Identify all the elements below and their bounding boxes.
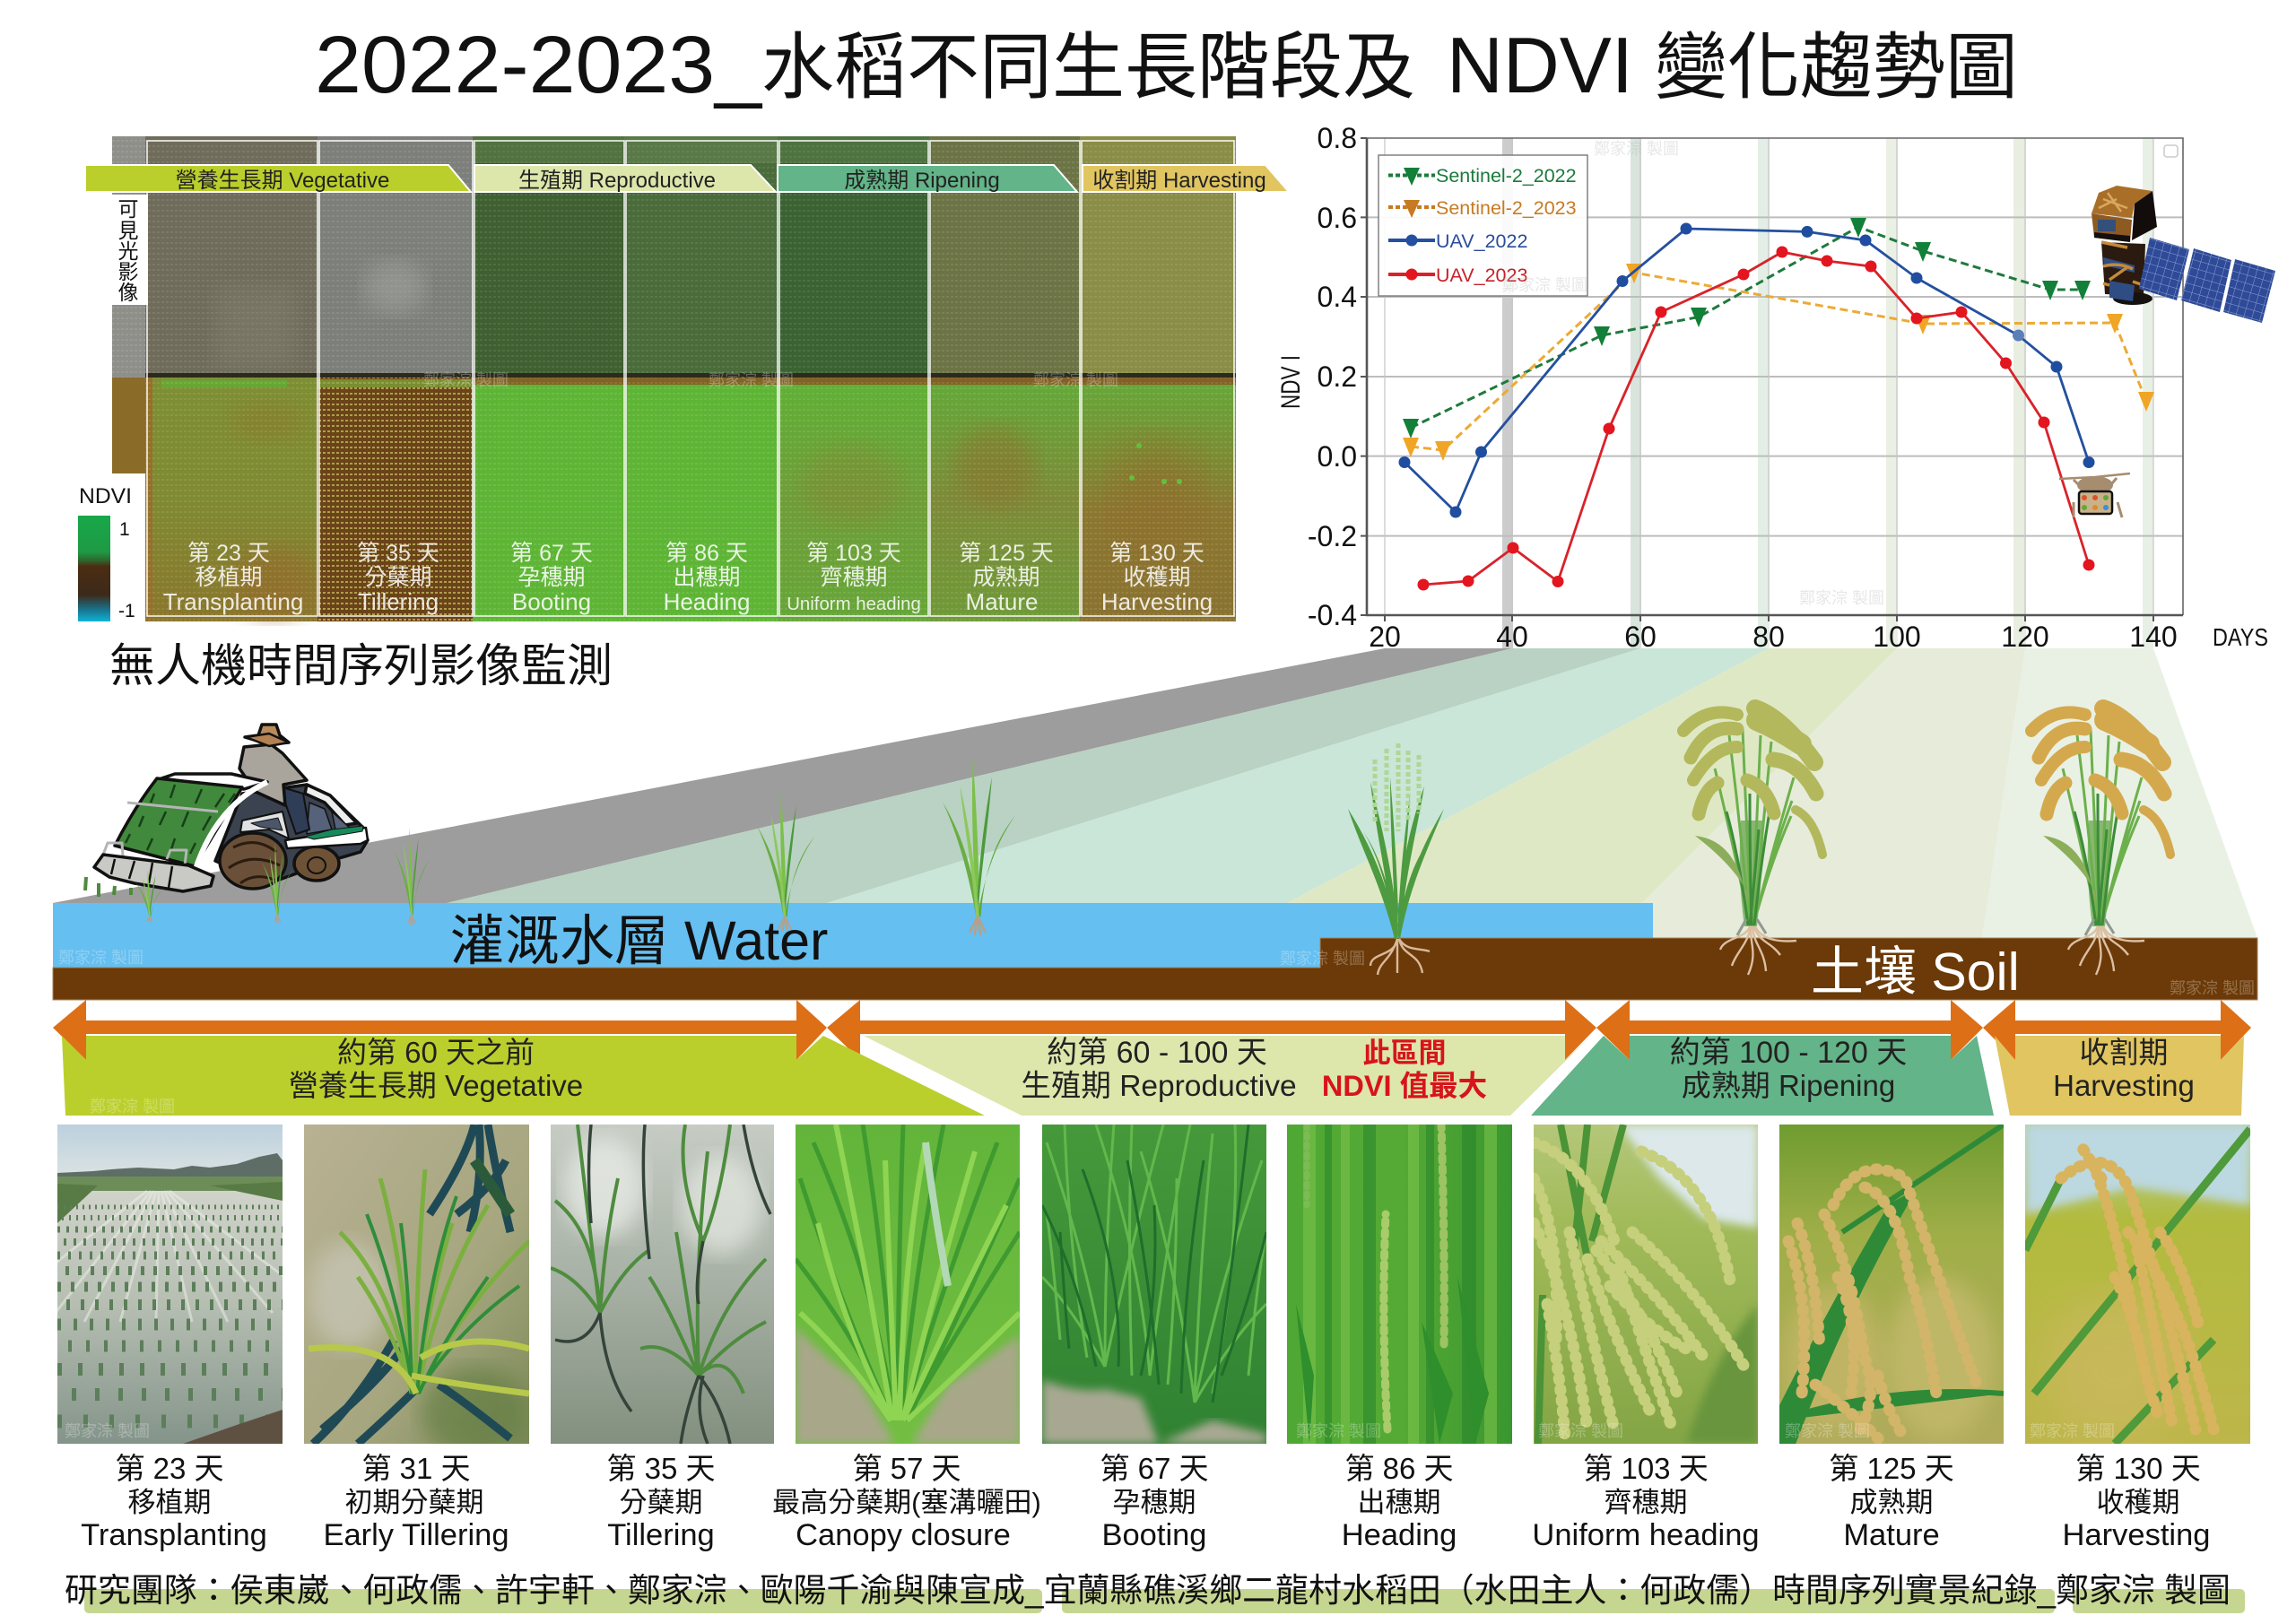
caption: day 67: Booting — [1101, 1518, 1207, 1552]
icon: rice transplanter with driver — [85, 725, 368, 897]
plant: heading stage — [1348, 743, 1444, 975]
stage labels on the imagery: Booting — [512, 588, 591, 615]
banner: Reproductive: 生殖期 Reproductive — [518, 169, 716, 193]
caption: UAV monitoring: 無人機時間序列影像監測 — [109, 640, 613, 691]
photo: day 130 harvesting — [2025, 1125, 2250, 1444]
watermarks: 鄭家淙 製圖 — [1296, 1422, 1381, 1440]
seedling: day 31 — [262, 843, 293, 924]
watermarks: 鄭家淙 製圖 — [1785, 1422, 1870, 1440]
panel: reproductive period — [864, 1036, 1591, 1116]
banner: Vegetative: 營養生長期 Vegetative — [176, 169, 389, 193]
NDVI imagery band — [112, 378, 1236, 621]
chart legend: UAV_2023 — [1436, 265, 1527, 286]
watermarks: 鄭家淙 製圖 — [90, 1098, 175, 1116]
caption: day 86: 出穗期 — [1358, 1487, 1440, 1518]
watermarks: 鄭家淙 製圖 — [65, 1422, 150, 1440]
caption: day 35: 第 35 天 — [606, 1452, 716, 1485]
arrow: reproductive span — [827, 1000, 1596, 1060]
label: visible-light imagery: 可 — [118, 197, 138, 221]
y-axis tick labels: -0.4 — [1308, 599, 1357, 631]
plant: harvest stage — [2031, 708, 2170, 975]
series: UAV 2023 — [1417, 246, 2095, 590]
caption: day 130: 收穫期 — [2097, 1487, 2179, 1518]
panel: ripening period — [1531, 1036, 1994, 1116]
caption: day 57: 最高分蘖期(塞溝曬田) — [772, 1487, 1041, 1518]
y-axis tick labels: 0.0 — [1318, 440, 1357, 473]
stage labels on the imagery: 出穗期 — [673, 565, 741, 590]
plant: ripening stage — [1683, 708, 1822, 975]
stage labels on the imagery: Heading — [664, 588, 750, 615]
photo captions — [81, 1452, 2210, 1552]
caption: day 67: 孕穗期 — [1112, 1487, 1196, 1518]
panel: vegetative period — [62, 1036, 985, 1116]
irrigation water layer: 灌溉水層 Water — [450, 910, 828, 971]
watermarks: 鄭家淙 製圖 — [1280, 950, 1365, 968]
x-axis tick labels: 60 — [1624, 621, 1657, 653]
panel: ripening period: 成熟期 Ripening — [1682, 1069, 1895, 1102]
banner: Harvesting: 收割期 Harvesting — [1092, 169, 1266, 193]
NDVI colour legend — [78, 484, 135, 621]
frames around each date column — [147, 141, 1234, 616]
watermarks: 鄭家淙 製圖 — [1538, 1422, 1623, 1440]
watermarks: 鄭家淙 製圖 — [2030, 1422, 2115, 1440]
stage labels on the imagery: Mature — [966, 588, 1038, 615]
stage labels on the imagery: 齊穗期 — [820, 565, 888, 590]
caption: day 103: Uniform heading — [1532, 1518, 1760, 1552]
label: visible-light imagery: 影 — [118, 260, 138, 283]
y-axis tick labels: 0.4 — [1318, 281, 1357, 313]
seedling: day 35 — [395, 828, 430, 925]
caption: day 23: 移植期 — [127, 1487, 212, 1518]
stage labels on the imagery: 第 103 天 — [806, 541, 901, 566]
photo: day 31 early tillering — [304, 1125, 529, 1444]
x-axis tick labels — [1369, 621, 2178, 653]
caption: day 125: 成熟期 — [1849, 1487, 1934, 1518]
caption: day 23: 第 23 天 — [115, 1452, 224, 1485]
title: 水稻不同生長階段及 — [761, 28, 1415, 109]
watermarks: 鄭家淙 製圖 — [58, 949, 144, 967]
panel: vegetative period: 營養生長期 Vegetative — [289, 1069, 583, 1102]
title: NDVI — [1447, 21, 1633, 109]
perspective wedges from chart down to the field — [53, 648, 2257, 938]
chart legend: Sentinel-2_2023 — [1436, 197, 1577, 219]
NDVI line chart — [1276, 122, 2268, 653]
stage labels on the imagery: Uniform heading — [787, 595, 921, 614]
arrow: harvesting span — [1983, 1000, 2251, 1060]
soil layer: 土壤 Soil — [1811, 942, 2020, 1002]
stage labels on the imagery: 第 23 天 — [187, 541, 270, 566]
caption: day 23: Transplanting — [81, 1518, 267, 1552]
arrow: vegetative span — [53, 1000, 827, 1060]
caption: day 130 — [2063, 1452, 2210, 1552]
caption: day 86: 第 86 天 — [1344, 1452, 1454, 1485]
caption: day 67 — [1100, 1452, 1209, 1552]
visible-light imagery band — [112, 136, 1236, 378]
seedling: day 23 — [136, 870, 165, 922]
photo: day 125 mature — [1779, 1125, 2004, 1444]
timeline arrows — [53, 1000, 2251, 1060]
watermarks — [58, 140, 2255, 1440]
caption: day 103: 第 103 天 — [1583, 1452, 1709, 1485]
panel: reproductive period: NDVI 值最大 — [1322, 1070, 1487, 1102]
x-axis tick labels: 20 — [1369, 621, 1401, 653]
series: UAV 2022 — [1399, 222, 2095, 518]
x-axis tick labels: 120 — [2001, 621, 2049, 653]
stage labels on the imagery: Transplanting — [163, 588, 303, 615]
caption: day 35 — [606, 1452, 716, 1552]
title: 變化趨勢圖 — [1655, 28, 2018, 109]
arrow: ripening span — [1596, 1000, 1983, 1060]
caption: day 86 — [1342, 1452, 1457, 1552]
y-axis title: NDV I — [1276, 355, 1306, 409]
watermarks: 鄭家淙 製圖 — [1502, 276, 1587, 294]
panel: harvesting period: 收割期 — [2079, 1036, 2169, 1069]
stage labels on the imagery: 第 130 天 — [1109, 541, 1205, 566]
photo: day 103 uniform heading — [1534, 1125, 1758, 1444]
NDVI colour legend: 1 — [119, 519, 130, 540]
caption: day 103 — [1532, 1452, 1760, 1552]
caption: day 31: Early Tillering — [323, 1518, 509, 1552]
caption: day 31: 初期分蘖期 — [344, 1487, 484, 1518]
caption: day 130: Harvesting — [2063, 1518, 2210, 1552]
watermarks: 鄭家淙 製圖 — [1799, 589, 1884, 607]
watermarks: 鄭家淙 製圖 — [709, 371, 794, 389]
caption: day 86: Heading — [1342, 1518, 1457, 1552]
panel: ripening period: 約第 100 - 120 天 — [1670, 1036, 1907, 1070]
y-axis tick labels: 0.8 — [1318, 122, 1357, 154]
NDVI colour legend: NDVI — [79, 484, 132, 508]
banner: Reproductive — [474, 165, 776, 193]
chart legend: UAV_2022 — [1436, 230, 1527, 252]
y-axis tick labels: -0.2 — [1308, 520, 1357, 552]
caption: day 35: Tillering — [607, 1518, 715, 1552]
panel: reproductive period: 此區間 — [1363, 1038, 1446, 1069]
chart legend: Sentinel-2_2022 — [1436, 165, 1577, 187]
stage bands — [1502, 138, 2153, 648]
x-axis tick labels: 100 — [1873, 621, 1921, 653]
y-axis tick labels — [1308, 122, 1357, 631]
label: visible-light imagery: 像 — [118, 281, 138, 304]
irrigation water layer — [53, 903, 1653, 971]
banner: Vegetative — [85, 165, 471, 193]
stage labels on the imagery: 分蘖期 — [364, 565, 432, 590]
caption: day 23 — [81, 1452, 267, 1552]
stage labels on the imagery: 第 67 天 — [510, 541, 593, 566]
caption: day 57 — [772, 1452, 1041, 1552]
caption: day 57: 第 57 天 — [852, 1452, 961, 1485]
icon: satellite — [2092, 186, 2275, 323]
banner: Ripening: 成熟期 Ripening — [844, 169, 1000, 193]
photo: day 57 canopy closure — [796, 1125, 1020, 1444]
stage labels on the imagery: Tillering — [358, 588, 439, 615]
stage labels on the imagery: 孕穗期 — [517, 565, 586, 590]
caption: day 35: 分蘖期 — [619, 1487, 703, 1518]
caption: day 125: 第 125 天 — [1829, 1452, 1954, 1485]
x-axis tick labels: 140 — [2129, 621, 2178, 653]
caption: day 103: 齊穗期 — [1604, 1487, 1688, 1518]
watermarks: 鄭家淙 製圖 — [1033, 371, 1118, 389]
photo: day 23 transplanting field — [57, 1125, 283, 1444]
watermarks: 鄭家淙 製圖 — [1594, 140, 1679, 158]
stage labels on the imagery — [163, 541, 1213, 615]
series: Sentinel-2 2022 — [1403, 218, 2091, 439]
title: 2022-2023_ — [315, 21, 763, 110]
soil layer — [53, 938, 2257, 1002]
stage labels on the imagery: 成熟期 — [972, 565, 1040, 590]
stage labels on the imagery: Harvesting — [1101, 588, 1213, 615]
stage labels on the imagery: 收穫期 — [1123, 565, 1191, 590]
panel: reproductive period: 約第 60 - 100 天 — [1047, 1036, 1267, 1070]
x-axis tick labels: 80 — [1752, 621, 1785, 653]
series: Sentinel-2 2023 — [1403, 264, 2154, 461]
label: visible-light imagery: 見 — [118, 219, 138, 242]
panel: vegetative period: 約第 60 天之前 — [337, 1036, 535, 1069]
y-axis tick labels: 0.2 — [1318, 360, 1357, 393]
caption: day 31: 第 31 天 — [361, 1452, 471, 1485]
label: visible-light imagery: 光 — [118, 239, 138, 263]
photo: day 35 tillering — [551, 1125, 774, 1444]
chart legend — [1378, 155, 1587, 296]
label: visible-light imagery — [112, 195, 148, 305]
NDVI colour legend: -1 — [118, 601, 135, 621]
photo: day 67 booting — [1042, 1125, 1266, 1444]
stage labels on the imagery: 第 86 天 — [665, 541, 748, 566]
x-axis unit: DAYS — [2213, 623, 2268, 651]
title — [315, 21, 2018, 110]
seedling: day 67 — [943, 758, 1015, 935]
icon: drone — [2059, 473, 2130, 517]
y-axis tick labels: 0.6 — [1318, 202, 1357, 234]
panel: reproductive period: 生殖期 Reproductive — [1021, 1070, 1297, 1103]
watermarks: 鄭家淙 製圖 — [423, 371, 509, 389]
footer credit with green highlight: 研究團隊：侯東崴、何政儒、許宇軒、鄭家淙、歐陽千渝與陳宣成_宜蘭縣礁溪鄉二龍村水稻田（水田主人：何政儒）時間序列實景紀錄_鄭家淙 製圖 — [65, 1572, 2231, 1609]
x-axis tick labels: 40 — [1496, 621, 1528, 653]
panel: UAV time-series imagery mosaic — [85, 136, 1289, 621]
seedling: day 57 — [757, 791, 815, 932]
caption: day 125: Mature — [1843, 1518, 1940, 1552]
photo: day 86 heading — [1287, 1125, 1512, 1444]
caption: day 130: 第 130 天 — [2075, 1452, 2201, 1485]
stage labels on the imagery: 第 125 天 — [959, 541, 1054, 566]
stage labels on the imagery: 第 35 天 — [357, 541, 439, 566]
caption: day 125 — [1829, 1452, 1954, 1552]
watermarks: 鄭家淙 製圖 — [2170, 979, 2255, 997]
panel: harvesting period — [1995, 1036, 2244, 1116]
caption: day 67: 第 67 天 — [1100, 1452, 1209, 1485]
stage labels on the imagery: 移植期 — [195, 565, 263, 590]
caption: day 57: Canopy closure — [796, 1518, 1011, 1552]
caption: day 31 — [323, 1452, 509, 1552]
banner: Ripening — [778, 165, 1077, 193]
panel: harvesting period: Harvesting — [2053, 1069, 2195, 1102]
